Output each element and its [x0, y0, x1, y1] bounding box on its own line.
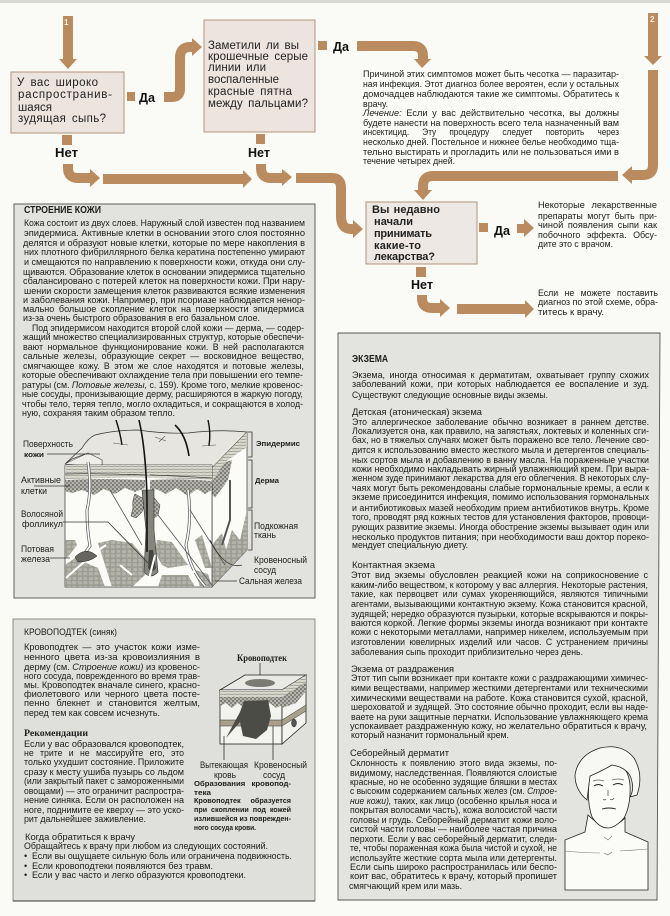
labels: skin cross-section: клетки: [21, 486, 47, 496]
text: see a doctor: диагноз по этой схеме, обра-: [538, 297, 658, 307]
subheading: seborrheic dermatitis: Себорейный дерматит: [350, 748, 450, 759]
text: skin structure body: шении скорости замещения клеток развиваются всякие изменения: [24, 286, 305, 296]
text: scabies: течение четырех дней.: [363, 156, 455, 166]
text: scabies: тельно выстирать и прогладить или не пользоваться ими в: [363, 147, 619, 157]
labels: bruise cross-section: Кровоподтек: [237, 653, 288, 663]
text: contact eczema: [351, 570, 648, 657]
text: atopic eczema: [352, 417, 649, 550]
text: scabies: будете нанести на поверхность всего тела назначенный вам: [363, 118, 619, 128]
labels: bruise cross-section: сосуд: [263, 770, 286, 780]
list: when to see a doctor: Если вы ощущаете сильную боль или ограничена подвижность.: [32, 851, 292, 861]
text: atopic eczema: кожи необходимо накладывать жирный увлажняющий крем. При выра-: [352, 464, 649, 474]
caption: bruise formation: Кровоподтек образуется: [194, 796, 291, 805]
leader lines: [34, 454, 242, 581]
caption: bruise formation: тека: [194, 788, 212, 797]
text: eczema intro: [352, 370, 649, 400]
text: see a doctor: титесь к врачу.: [538, 307, 604, 317]
arrow: start 2: [644, 13, 662, 65]
text: scabies: Причиной этих симптомов может быть чесотка — паразитар-: [363, 69, 619, 79]
text: seborrheic dermatitis: с высоким содержанием сальных желез (см. Строе-: [350, 786, 557, 796]
text: recommendations: ноге, поднимите ее кверху — это уско-: [24, 805, 184, 815]
text: irritant eczema: химическими веществами на работе. Кожа становится сухой, красной,: [351, 693, 648, 703]
right face: [212, 432, 247, 587]
text: seborrheic dermatitis: головы и грудь. Себорейный дерматит кожи воло-: [350, 815, 557, 825]
text: contact eczema: изготовлении ювелирных изделий или часов. С устранением причины: [351, 637, 648, 647]
yes branch 2: [318, 39, 431, 68]
text: seborrheic dermatitis: смягчающий крем или мазь.: [349, 881, 462, 891]
no branch 1: Нет: [55, 145, 78, 160]
text: skin structure body: ные сосуды, пронизывающие дерму, расширяются в жаркую погоду,: [22, 389, 303, 399]
text: contact eczema: такие, как первоцвет или сумах укореняющийся, являются типичными: [351, 589, 648, 599]
text: seborrheic dermatitis: ние кожи), таких, как лицо (особенно крылья носа и: [350, 796, 557, 806]
text: recommendations: овощами) — это ограничит распростра-: [24, 786, 184, 796]
no branch 3: Нет: [411, 277, 433, 292]
text: seborrheic dermatitis: перхоти. Если у вас себорейный дерматит, следи-: [350, 834, 557, 844]
text: atopic eczema: несколько продуктов питания; при необходимости ваш доктор пореко-: [352, 532, 649, 542]
no branch 3: [411, 267, 534, 318]
list: when to see a doctor: •: [24, 870, 27, 880]
text: bruise description: ненного цвета из-за кровоизлияния в: [24, 652, 200, 662]
text: skin structure body: Под эпидермисом находится второй слой кожи — дерма, — содер-: [32, 323, 304, 333]
labels: bruise cross-section: кровь: [214, 770, 236, 780]
diagram: bruise cross-section: [220, 663, 306, 760]
text: contact eczema: заболевания сыпь проходит приблизительно через день.: [351, 647, 583, 657]
illustration: head and shoulders: [565, 747, 648, 890]
list: when to see a doctor: Если кровоподтеки появляются без травм.: [32, 861, 213, 871]
labels: skin cross-section: Волосяной: [21, 509, 63, 519]
question box 2: красные пятна: [208, 86, 293, 98]
text: seborrheic dermatitis: покрытая волосами часть), кожа волосистой части: [350, 805, 557, 815]
text: skin structure body: мально большое скопление клеток на поверхности эпидермиса: [23, 304, 304, 314]
text: scabies: несколько дней. Постельное и нижнее белье необходимо тща-: [363, 137, 619, 147]
text: irritant eczema: [350, 673, 648, 740]
bracket bars: [248, 432, 252, 550]
text: skin structure body: чтобы тело, теряя тепло, могло охладиться, и сокращаются в холод-: [22, 399, 303, 409]
text: atopic eczema: дится к использованию вместо жесткого мыла и детергентов специаль-: [352, 445, 649, 455]
text: see a doctor: Если не можете поставить: [538, 288, 658, 298]
labels: skin cross-section: [21, 439, 307, 586]
text: bruise description: перед тем как совсем исчезнуть.: [24, 708, 160, 718]
text: contact eczema: каким-либо веществом, к которому у вас аллергия. Некоторые растения,: [351, 580, 648, 590]
subheading: irritant eczema: Экзема от раздражения: [351, 664, 454, 675]
yes branch 3: [479, 219, 534, 238]
no branch 2: Нет: [248, 145, 270, 160]
yes branch 3: Да: [494, 223, 511, 238]
text: irritant eczema: шероховатой и зудящей. Это состояние обычно проходит, если вы наде-: [351, 702, 648, 712]
labels: skin cross-section: Сальная железа: [239, 576, 302, 586]
labels: skin cross-section: Кровеносный: [254, 555, 307, 565]
text: skin structure body: смягчающее кожу. В этом же слое находятся и потовые железы,: [23, 361, 304, 371]
text: scabies: Лечение: Если у вас действительно чесотка, вы должны: [362, 108, 619, 118]
text: skin structure body: щиваются. Образование клеток в основании эпидермиса тщательно: [23, 267, 305, 277]
labels: skin cross-section: Потовая: [21, 544, 54, 554]
list: when to see a doctor: Обращайтесь к врачу при любом из следующих состояний.: [24, 841, 268, 851]
caption: bruise formation: при скоплении под кожей: [194, 805, 291, 814]
labels: bruise cross-section: [200, 653, 307, 780]
text: skin structure body: ную, сохраняя таким образом тепло.: [22, 408, 175, 418]
text: scabies: ная инфекция. Этот диагноз более вероятен, если у остальных: [363, 79, 619, 89]
text: atopic eczema: бах, но в тяжелых случаях может быть поражено все тело. Лечение сво-: [352, 435, 649, 445]
panel: skin structure: [14, 204, 315, 598]
subheading: atopic eczema: Детская (атоническая) экзема: [352, 407, 483, 418]
text: seborrheic dermatitis: те, чтобы пораженная кожа была чистой и сухой, не: [350, 843, 557, 853]
question box 1: распространив-: [18, 89, 112, 101]
no branch 1: [55, 135, 252, 188]
subheading: recommendations: Рекомендации: [24, 728, 88, 738]
text: skin structure body: сбалансировано с потерей клеток на поверхности кожи. При нару-: [23, 276, 305, 286]
arrow: start 1: 1: [64, 18, 69, 27]
text: bruise description: фиолетового или черного цвета посте-: [24, 689, 200, 699]
labels: bruise cross-section: Вытекающая: [200, 760, 248, 770]
text: bruise description: мы. Кровоподтек вначале синего, красно-: [24, 680, 200, 690]
text: recommendations: сразу к месту ушиба пузырь со льдом: [24, 767, 184, 777]
caption: bruise formation: Образования кровопод-: [194, 779, 292, 788]
text: skin structure body: Кожа состоит из двух слоев. Наружный слой известен под названием: [24, 218, 305, 228]
text: recommendations: рит дальнейшее заживление.: [24, 814, 146, 824]
caption: bruise formation: [194, 779, 292, 832]
sebaceous gland and follicle: [131, 494, 146, 518]
text: atopic eczema: того, проводят ряд кожных тестов для установления факторов, провоци-: [352, 512, 649, 522]
text: seborrheic dermatitis: Склонность к появлению этого вида экземы, по-: [350, 758, 557, 768]
text: skin structure body: ратуры (см. Потовые железы, с. 159). Кроме того, мелкие кровенос-: [22, 380, 303, 390]
question box 2: линии или: [208, 62, 266, 74]
question box 3: лекарства?: [374, 251, 435, 263]
question box 3: какие-то: [374, 240, 421, 252]
question box 2: крошечные серые: [208, 51, 308, 63]
text: medication side effects: [538, 200, 657, 249]
diagram: skin cross-section: [34, 420, 252, 587]
question box 2: Заметили ли вы: [208, 40, 299, 52]
hairs: [139, 420, 147, 552]
question box 1: [11, 72, 124, 133]
text: eczema intro: Существуют следующие основные виды экземы.: [352, 390, 548, 400]
labels: skin cross-section: Подкожная: [254, 521, 298, 531]
text: medication side effects: препараты могут быть при-: [538, 211, 657, 221]
vessels: [80, 462, 90, 560]
text: skin structure body: вают нормальное функционирование кожи. В ней располагаются: [23, 342, 304, 352]
text: bruise description: Кровоподтек — это участок кожи изме-: [24, 642, 200, 652]
yes branch 1: Да: [139, 90, 156, 105]
labels: skin cross-section: Активные: [21, 475, 61, 485]
text: eczema intro: Экзема, иногда относимая к дерматитам, охватывает группу схожих: [352, 370, 649, 380]
text: skin structure body: сальные железы, образующие секрет — восковидное вещество,: [23, 351, 304, 361]
text: skin structure body: них плотного фибриллярного белка кератина постепенно умирают: [24, 247, 305, 257]
heading: skin structure: СТРОЕНИЕ КОЖИ: [24, 205, 101, 216]
no branch 2: [248, 134, 363, 238]
text: atopic eczema: женном зуде принимают лекарства для его облегчения. В некоторых слу-: [352, 473, 649, 483]
text: medication side effects: Некоторые лекарственные: [538, 200, 657, 210]
arrow: start 1: [59, 16, 77, 69]
text: bruise description: [24, 642, 200, 718]
panel: bruise: [13, 619, 315, 901]
labels: skin cross-section: Эпидермис: [256, 439, 300, 448]
text: seborrheic dermatitis: Если сыпь широко распространилась или беспо-: [350, 862, 557, 872]
labels: skin cross-section: кожи: [24, 450, 44, 459]
text: bruise description: пенно блекнет и становится желтым,: [24, 698, 200, 708]
question box 2: [204, 20, 315, 132]
list: when to see a doctor: •: [24, 851, 27, 861]
text: irritant eczema: который назначит гормональный крем.: [351, 730, 509, 740]
text: recommendations: нение синяка. Если он расположен на: [24, 795, 184, 805]
front face: [65, 465, 212, 587]
question box 3: принимать: [374, 228, 432, 240]
labels: bruise cross-section: Кровеносный: [254, 760, 307, 770]
question box 1: шаяся: [18, 102, 52, 114]
text: scabies: инсектицид. Эту процедуру следует повторить через: [363, 127, 619, 137]
text: seborrheic dermatitis: используйте жесткие сорта мыла или детергенты.: [350, 853, 557, 863]
text: eczema intro: заболеваний кожи, при которых наблюдается ее воспаление и зуд.: [352, 379, 649, 389]
yes branch 2: Да: [333, 39, 350, 54]
text: bruise description: дерму (см. Строение кожи) из кровенос-: [24, 662, 200, 672]
arrow: return path: [414, 70, 653, 200]
text: contact eczema: кожи с некоторыми металлами, например никелем, используемым при: [351, 627, 648, 637]
text: skin structure body: из-за очень быстрого образования в его базальном слое.: [23, 313, 260, 323]
question box 1: зудящая сыпь?: [18, 113, 106, 125]
text: scabies: [362, 69, 619, 166]
text: recommendations: [24, 739, 184, 824]
text: contact eczema: агентами, вызывающими контактную экзему. Кожа становится красной,: [351, 599, 648, 609]
text: atopic eczema: чаях могут быть рекомендованы слабые гормональные кремы, а если к: [352, 483, 649, 493]
yes branch 1: [127, 38, 202, 105]
text: seborrheic dermatitis: видимому, наследственная. Появляются слоистые: [350, 768, 557, 778]
text: medication side effects: дите это с врачом.: [538, 239, 613, 249]
text: skin structure body: жащий множество специализированных структур, которые обеспечи-: [23, 332, 304, 342]
text: recommendations: не трите и не массируйте его, это: [24, 748, 184, 758]
caption: bruise formation: ного сосуда крови.: [194, 823, 256, 832]
question box 3: [366, 202, 477, 264]
text: irritant eczema: ваете на руки защитные перчатки. Использование увлажняющего крема: [351, 712, 648, 722]
subheading: contact eczema: Контактная экзема: [352, 560, 436, 571]
text: seborrheic dermatitis: систой части головы — наиболее частая причина: [350, 824, 557, 834]
subheading: when to see a doctor: Когда обратиться к врачу: [25, 832, 135, 843]
text: contact eczema: зудящей; нередко образуются пузырьки, которые вскрываются и покры-: [351, 609, 648, 619]
text: atopic eczema: экземе присоединится инфекция, помимо использования гормональных: [352, 492, 649, 502]
text: irritant eczema: Этот тип сыпи возникает при контакте кожи с раздражающими химичес-: [351, 673, 648, 683]
text: atopic eczema: Локализуется она, как правило, на запястьях, локтевых и коленных сги-: [352, 426, 649, 436]
arrow: start 2: 2: [650, 15, 655, 24]
top surface: [65, 430, 247, 468]
text: contact eczema: Этот вид экземы обусловлен реакцией кожи на соприкосновение с: [351, 570, 648, 580]
text: see a doctor: [538, 288, 658, 317]
text: recommendations: только ухудшит состояние. Приложите: [24, 757, 184, 767]
labels: skin cross-section: ткань: [254, 530, 276, 540]
text: skin structure body: и заболевания кожи. Например, при псориазе наблюдается ненор-: [23, 295, 305, 305]
labels: skin cross-section: фолликул: [22, 519, 63, 529]
text: irritant eczema: успокаивает раздраженную кожу, но желательно обратиться к врачу,: [350, 721, 647, 731]
text: skin structure body: [22, 218, 305, 418]
question box 1: У вас широко: [17, 77, 98, 89]
text: contact eczema: ваются коркой. Легкие формы экземы иногда возникают при контакте: [351, 618, 648, 628]
caption: bruise formation: излившейся из поврежден-: [194, 814, 291, 823]
text: atopic eczema: Это аллергическое заболевание обычно возникает в раннем детстве.: [352, 417, 649, 427]
list: when to see a doctor: •: [24, 861, 27, 871]
list: when to see a doctor: Если у вас часто и легко образуются кровоподтеки.: [32, 870, 246, 880]
text: seborrheic dermatitis: красные, но не особенно зудящие бляшки в местах: [350, 777, 557, 787]
text: scabies: домочадцев наблюдаются такие же симптомы. Обратитесь к: [363, 89, 619, 99]
fat lobules: [65, 540, 77, 558]
question box 2: между пальцами?: [208, 98, 308, 110]
text: atopic eczema: рующих развитие экземы. Иногда обострение экземы вызывает один или: [352, 522, 649, 532]
labels: skin cross-section: железа: [21, 554, 50, 564]
heading: bruise: КРОВОПОДТЕК (синяк): [24, 627, 117, 638]
list: when to see a doctor: [24, 841, 292, 880]
text: medication side effects: чиной появления сыпи как: [538, 220, 657, 230]
question box 2: воспаленные: [208, 74, 279, 86]
text: atopic eczema: мендует специальную диету.: [352, 540, 468, 550]
text: irritant eczema: кими веществами, например жесткими детергентами или техническими: [351, 683, 648, 693]
text: atopic eczema: и антибиотиковых мазей необходим прием антибиотиков внутрь. Кроме: [352, 503, 649, 513]
text: atopic eczema: ных сортов мыла и добавлению в ванну масла. На пораженные участки: [352, 455, 649, 465]
text: scabies: врачу.: [363, 99, 388, 109]
text: skin structure body: и смещаются по направлению к поверхности кожи, откуда они слу-: [24, 257, 305, 267]
text: skin structure body: эпидермиса. Активные клетки в основании этого слоя постоянно: [24, 228, 305, 238]
question box 3: Вы недавно: [372, 204, 440, 216]
flowchart: [11, 13, 662, 318]
text: seborrheic dermatitis: коит вас, обратитесь к врачу, который пропишет: [350, 871, 557, 881]
question box 3: начали: [374, 216, 413, 228]
text: skin structure body: которые обеспечивают охлаждение тела при повышении его темпе-: [22, 370, 303, 380]
labels: skin cross-section: Дерма: [255, 476, 280, 485]
text: medication side effects: побочного эффекта. Обсу-: [538, 230, 657, 240]
labels: skin cross-section: сосуд: [254, 565, 277, 575]
text: bruise description: ного сосуда, поврежденного во время трав-: [24, 671, 200, 681]
text: recommendations: (или закрытый пакет с замороженными: [24, 776, 184, 786]
text: recommendations: Если у вас образовался кровоподтек,: [24, 739, 184, 749]
text: seborrheic dermatitis: [349, 758, 557, 891]
heading: eczema: ЭКЗЕМА: [352, 354, 388, 365]
panel: eczema: [338, 333, 660, 900]
text: skin structure body: делятся и образуют новые клетки, которые по мере накопления в: [23, 238, 305, 248]
labels: skin cross-section: Поверхность: [23, 439, 73, 449]
